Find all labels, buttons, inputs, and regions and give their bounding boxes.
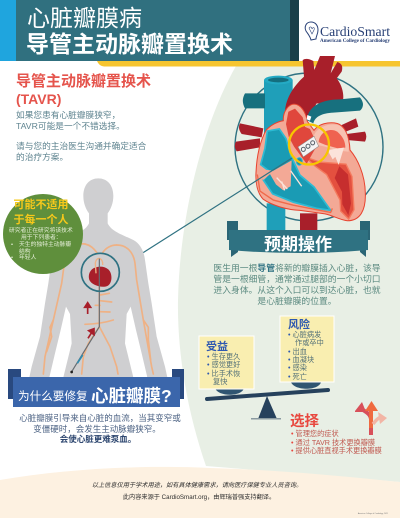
pulmonary artery left	[243, 93, 265, 108]
green callout: •	[11, 255, 13, 261]
arteries	[43, 244, 153, 374]
background panel: peach footer	[0, 467, 400, 518]
green callout: 天生的独特主动脉瓣	[19, 240, 71, 248]
side vessels	[235, 118, 366, 230]
right heart chambers	[261, 129, 331, 210]
benefits box: 受益	[206, 339, 228, 353]
intro text block: 请与您的主治医生沟通并确定适合	[16, 140, 147, 151]
expected procedure ribbon: 预期操作	[264, 235, 332, 254]
arrow up	[85, 303, 91, 314]
footer text: 以上信息仅用于学术用途，如有具体健康需求，请向医疗保健专业人员咨询。	[92, 481, 302, 489]
procedure text: 是心脏瓣膜的位置。	[257, 295, 337, 306]
risks box: • 出血	[288, 347, 307, 356]
expected procedure ribbon	[227, 221, 370, 257]
title: 心脏瓣膜病	[27, 5, 142, 31]
risks box: • 感染	[288, 363, 307, 372]
choices text: • 提供心脏直视手术更换瓣膜	[291, 446, 382, 455]
intro text block: 的治疗方案。	[16, 151, 68, 162]
vena cava	[264, 76, 293, 230]
intro text block: 如果您患有心脏瓣膜狭窄，	[16, 109, 120, 120]
green callout: 研究者正在研究将该技术	[9, 226, 73, 234]
risks box: • 心脏病发	[288, 330, 321, 339]
heart outer wall	[256, 104, 365, 221]
procedure text: 进入身体。从这个入口可以到达心脏，也就	[213, 284, 381, 295]
catheter	[70, 258, 103, 373]
risks box	[280, 316, 334, 382]
left ventricle inner	[335, 166, 351, 215]
green callout: •	[11, 242, 13, 248]
procedure text: 管是一根细管，通常通过腿部的一个小切口	[213, 273, 381, 284]
pulmonary artery right	[307, 97, 363, 123]
benefits box: 复快	[213, 377, 227, 386]
choices text: • 通过 TAVR 技术更换瓣膜	[291, 438, 375, 447]
heart in body	[89, 267, 111, 287]
connector line from body to heart	[119, 158, 292, 268]
left atrium inner	[319, 130, 345, 148]
tricuspid valve	[260, 160, 302, 190]
green callout: 结构	[19, 247, 31, 255]
risks box: • 死亡	[288, 372, 307, 381]
icon: branching arrows	[355, 401, 387, 435]
logo: CardioSmart	[305, 22, 390, 44]
procedure text	[213, 262, 381, 306]
benefits box: • 生存更久	[207, 352, 240, 361]
footer text: American College of Cardiology, 2021	[358, 512, 388, 515]
footer text	[92, 481, 388, 515]
mitral valve	[327, 148, 344, 165]
title: 导管主动脉瓣置换术	[26, 31, 233, 57]
choices text	[290, 412, 382, 455]
arrow diagonal	[88, 329, 94, 338]
why banner: 为什么要修复	[18, 389, 88, 403]
benefits box: • 感觉更好	[207, 360, 240, 369]
intro text block: (TAVR)	[16, 91, 61, 107]
aortic root	[286, 109, 317, 164]
septal line	[257, 175, 332, 212]
heart vessels	[235, 56, 366, 230]
choices text: • 管理您的症状	[291, 429, 339, 438]
left atrium	[313, 124, 349, 152]
green callout: 可能不适用	[14, 197, 68, 211]
benefits box	[199, 336, 254, 389]
risks box: • 血凝块	[288, 355, 314, 364]
background panel: green blob	[178, 66, 400, 482]
why text: 心脏瓣膜引导来自心脏的血流，当其变窄或	[19, 413, 181, 423]
circle around heart	[81, 253, 119, 291]
body silhouette	[29, 178, 167, 377]
human body figure	[29, 178, 167, 377]
aorta	[285, 56, 343, 120]
green callout: 年轻人	[19, 253, 37, 261]
logo: CardioSmart: American College of Cardiology	[320, 39, 390, 44]
footer text: 此内容来源于 CardioSmart.org，由辉瑞普强支持翻译。	[123, 493, 275, 501]
why text: 会使心脏更难泵血。	[60, 434, 136, 444]
yellow highlight ring	[289, 124, 329, 164]
heart illustration	[256, 104, 365, 221]
why banner	[8, 369, 184, 407]
green callout	[3, 194, 83, 274]
why text	[19, 413, 181, 444]
header band	[0, 0, 400, 66]
valve stent	[298, 136, 319, 157]
choices text: 选择	[290, 412, 319, 430]
intro text block	[16, 72, 151, 162]
left ventricle	[305, 157, 354, 219]
procedure text: 医生用一根导管将新的瓣膜插入心脏，该导	[213, 262, 381, 273]
green callout: 用于下列患者：	[21, 233, 62, 241]
intro text block: TAVR可能是一个不错选择。	[16, 120, 125, 131]
title	[26, 5, 233, 57]
risks box: 风险	[288, 317, 310, 331]
intro text block: 导管主动脉瓣置换术	[16, 72, 151, 90]
logo: CardioSmart: CardioSmart	[320, 25, 390, 40]
balance scale	[207, 382, 328, 420]
catheter tip	[296, 158, 302, 165]
benefits box: • 比手术恢	[207, 369, 240, 378]
why text: 变僵硬时，会发生主动脉瓣狭窄。	[33, 424, 161, 434]
why banner: 心脏瓣膜?	[91, 386, 172, 406]
heart diagram circle	[235, 73, 383, 221]
risks box: 作或卒中	[295, 338, 324, 347]
green callout: 于每一个人	[14, 212, 68, 226]
